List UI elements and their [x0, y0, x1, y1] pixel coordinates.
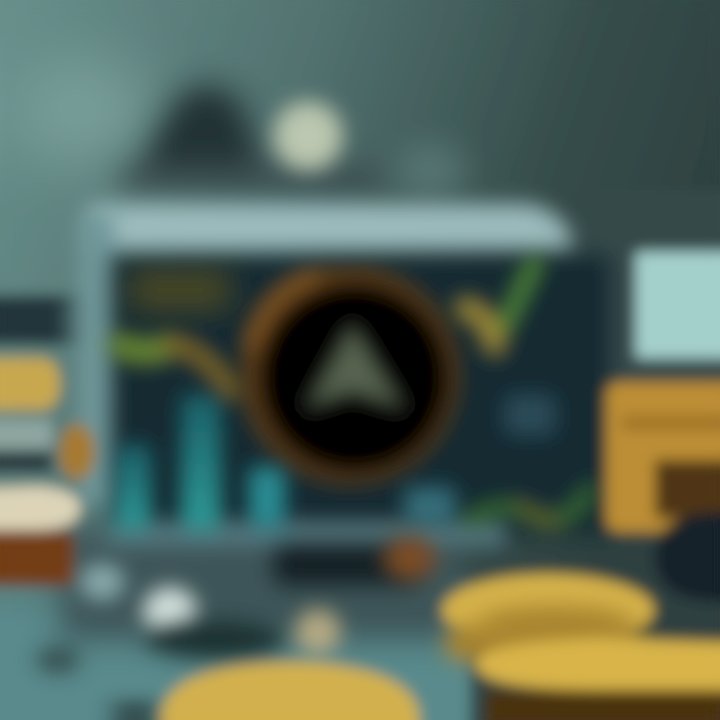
dark shadow [145, 620, 285, 660]
lamp globe [274, 102, 342, 170]
gold coins bottom right [442, 574, 720, 720]
monitor bottom bezel [105, 522, 505, 546]
monitor left bezel [78, 215, 114, 505]
gold coin centre bottom [160, 662, 420, 720]
pale blob centre [144, 588, 196, 636]
gold coin upper [442, 574, 654, 646]
pale coin top [296, 610, 340, 654]
logo triangle [302, 320, 408, 412]
coin stack left [0, 358, 95, 586]
gold coin top [0, 358, 60, 410]
dark object right [655, 512, 720, 602]
logo ring [242, 267, 458, 483]
logo disc [262, 286, 446, 470]
light band [0, 420, 52, 448]
brown coin side [485, 690, 720, 720]
desk clutter [36, 536, 436, 719]
dark blob [36, 646, 80, 674]
pale blob left [80, 564, 124, 600]
coin side [445, 625, 645, 661]
line chart left [118, 345, 232, 392]
screen haze [130, 270, 230, 310]
cream top [0, 486, 80, 530]
line chart lower right [470, 490, 590, 525]
monitor screen [112, 255, 610, 535]
line chart upper right [465, 262, 535, 345]
orange blob [384, 536, 436, 580]
monitor top bezel [88, 205, 572, 250]
dark band [0, 452, 52, 472]
gold stack right [606, 382, 720, 532]
logo ring highlight [252, 275, 320, 350]
logo badge [242, 267, 458, 483]
bar chart [116, 395, 555, 530]
desk surface [0, 530, 470, 720]
gold coin lower [476, 638, 720, 690]
monitor [78, 205, 610, 546]
window panel right [636, 252, 720, 358]
coin upper shade [479, 606, 631, 638]
dark blob bottom [109, 703, 161, 719]
brown base [0, 530, 74, 586]
orange coin [59, 424, 95, 480]
dark lamp silhouette [120, 85, 380, 193]
dark keyboard blob [272, 544, 422, 586]
